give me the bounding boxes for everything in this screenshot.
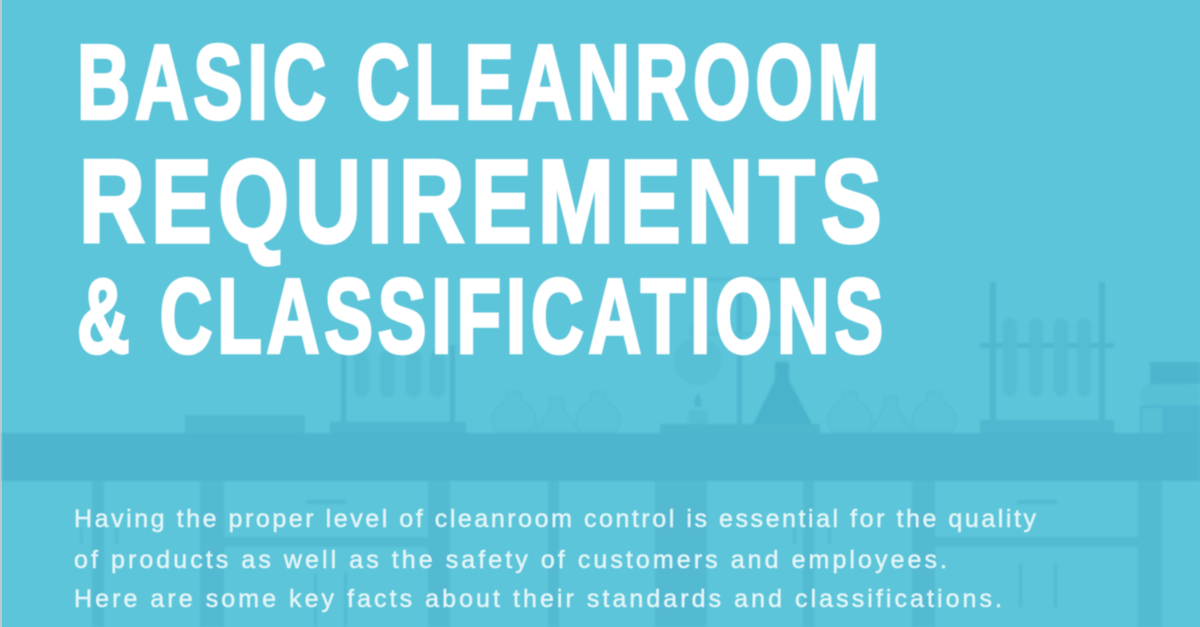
right flasks — [828, 392, 956, 433]
intro line 2: of products as well as the safety of customers and employees. — [74, 546, 947, 574]
right books — [1140, 362, 1200, 433]
left flasks — [492, 392, 620, 433]
title — [77, 24, 888, 376]
left test tube rack — [330, 345, 466, 433]
laboratory illustration — [2, 277, 1200, 627]
intro paragraph — [74, 505, 1037, 613]
retort stand with flask and burner — [660, 277, 820, 433]
right test tube rack — [980, 282, 1114, 433]
intro line 1: Having the proper level of cleanroom control is essential for the quality — [74, 505, 1037, 533]
left book — [185, 415, 305, 433]
title line 2: REQUIREMENTS — [79, 136, 888, 268]
bench legs and cabinets — [80, 481, 1162, 627]
intro line 3: Here are some key facts about their standards and classifications. — [74, 585, 1002, 613]
lab bench top — [2, 433, 1200, 481]
